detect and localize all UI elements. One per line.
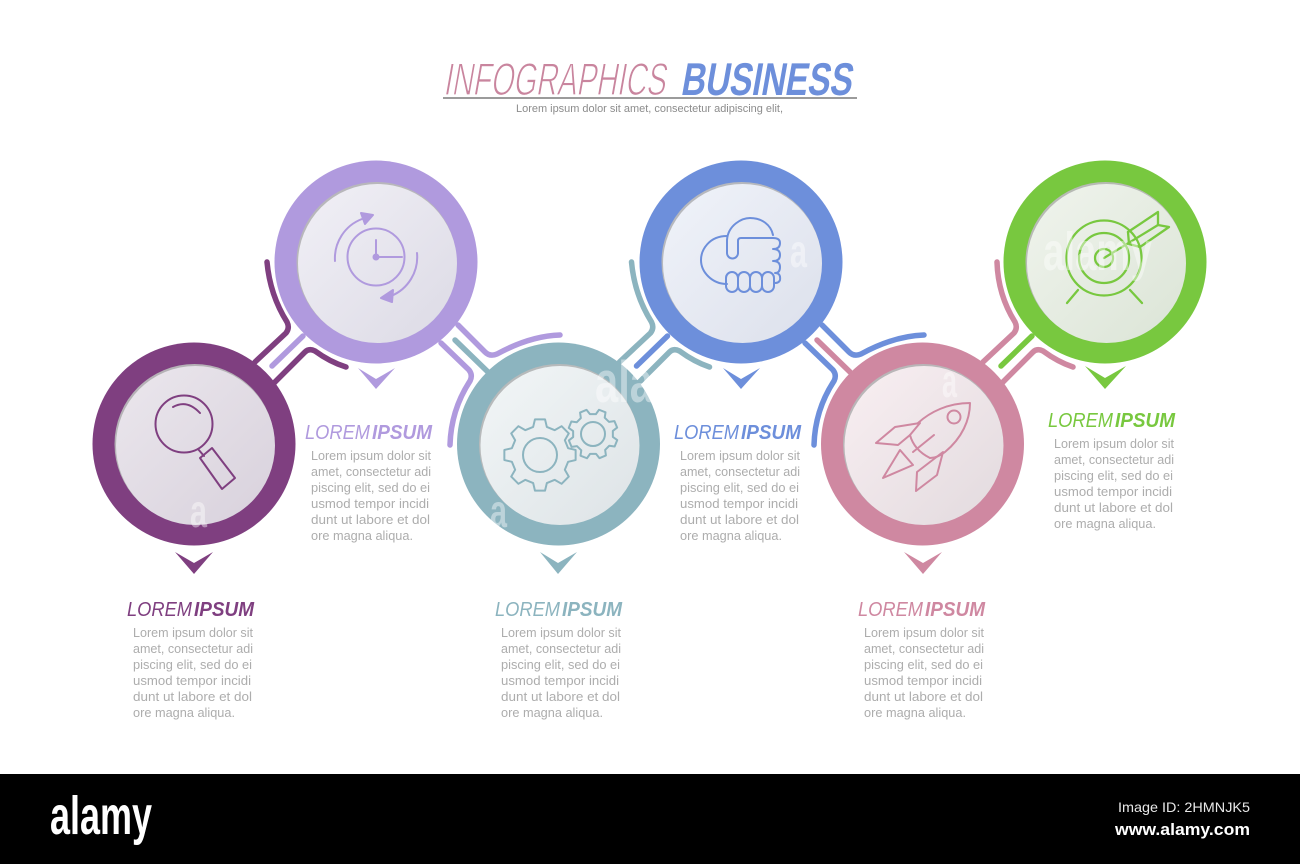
image id: Image ID: 2HMNJK5 xyxy=(1118,799,1250,815)
marker: step 5 chevron xyxy=(904,552,942,574)
text block: step 4: piscing elit, sed do ei xyxy=(680,481,799,495)
connector: step 1 to step 2 xyxy=(255,262,346,383)
text block: step 5: dunt ut labore et dol xyxy=(864,690,983,704)
heading: step 4 xyxy=(674,422,802,444)
text block: step 3: amet, consectetur adi xyxy=(501,642,621,656)
marker: step 2 chevron xyxy=(358,368,395,389)
heading: step 6: IPSUM xyxy=(1115,410,1176,432)
heading: step 6: LOREM xyxy=(1048,410,1113,432)
marker: step 3 chevron xyxy=(540,552,577,574)
marker: step 6 chevron xyxy=(1085,366,1126,389)
watermark overlays: a xyxy=(790,225,807,277)
heading: step 2: LOREM xyxy=(305,422,370,444)
text block: step 1: piscing elit, sed do ei xyxy=(133,658,252,672)
watermark overlays xyxy=(190,222,1152,537)
text block: step 2: Lorem ipsum dolor sit xyxy=(311,449,432,463)
heading: step 4: IPSUM xyxy=(741,422,802,444)
heading: step 6 xyxy=(1048,410,1176,432)
watermark overlays: alamy xyxy=(1043,222,1152,282)
text block: step 3: Lorem ipsum dolor sit xyxy=(501,626,622,640)
heading: step 3 xyxy=(495,599,623,621)
text block: step 4: amet, consectetur adi xyxy=(680,465,800,479)
watermark overlays: a xyxy=(190,485,207,537)
text block: step 1: usmod tempor incidi xyxy=(133,674,251,688)
text block: step 2: usmod tempor incidi xyxy=(311,497,429,511)
text block: step 4 xyxy=(674,422,802,543)
heading: step 1: LOREM xyxy=(127,599,192,621)
title: BUSINESS xyxy=(678,53,858,105)
connector: step 3 to step 4 xyxy=(620,262,710,383)
icon: target with arrow xyxy=(1066,212,1169,303)
heading: step 1 xyxy=(127,599,255,621)
subtitle: Lorem ipsum dolor sit amet, consectetur adipiscing elit, xyxy=(516,103,783,115)
text block: step 2: dunt ut labore et dol xyxy=(311,513,430,527)
footer bar xyxy=(0,774,1300,864)
text block: step 1: dunt ut labore et dol xyxy=(133,690,252,704)
text block: step 2: ore magna aliqua. xyxy=(311,529,413,543)
text block: step 3: usmod tempor incidi xyxy=(501,674,619,688)
icon: two gears xyxy=(504,402,625,491)
heading: step 3: IPSUM xyxy=(562,599,623,621)
heading: step 5 xyxy=(858,599,986,621)
heading: step 3: LOREM xyxy=(495,599,560,621)
step 4: handshake circle xyxy=(640,160,842,364)
text block: step 1: amet, consectetur adi xyxy=(133,642,253,656)
text block: step 6: piscing elit, sed do ei xyxy=(1054,469,1173,483)
icon: handshake xyxy=(701,218,780,292)
step 3: gears circle xyxy=(457,342,660,546)
icon: clock with rotating arrows xyxy=(335,213,417,302)
text block: step 5 xyxy=(858,599,986,720)
text block: step 3 xyxy=(495,599,623,720)
heading: step 2: IPSUM xyxy=(372,422,433,444)
text block: step 4: Lorem ipsum dolor sit xyxy=(680,449,801,463)
heading: step 1: IPSUM xyxy=(194,599,255,621)
text block: step 2: piscing elit, sed do ei xyxy=(311,481,430,495)
watermark overlays: a xyxy=(942,355,957,407)
text block: step 5: usmod tempor incidi xyxy=(864,674,982,688)
heading: step 5: LOREM xyxy=(858,599,923,621)
marker: step 1 chevron xyxy=(175,552,213,574)
watermark overlays: ala xyxy=(595,350,654,415)
heading: step 2 xyxy=(305,422,433,444)
text block: step 6: ore magna aliqua. xyxy=(1054,517,1156,531)
text block: step 6: usmod tempor incidi xyxy=(1054,485,1172,499)
connector: step 2 to step 3 xyxy=(441,325,560,445)
icon: magnifying glass xyxy=(156,396,235,489)
heading: step 4: LOREM xyxy=(674,422,739,444)
connector: step 5 to step 6 xyxy=(983,262,1073,383)
website: www.alamy.com xyxy=(1114,820,1250,839)
text block: step 5: piscing elit, sed do ei xyxy=(864,658,983,672)
marker: step 4 chevron xyxy=(723,368,760,389)
text block: step 6: dunt ut labore et dol xyxy=(1054,501,1173,515)
text block: step 1: Lorem ipsum dolor sit xyxy=(133,626,254,640)
step 6: target circle xyxy=(1004,160,1206,364)
footer logo: alamy xyxy=(50,786,152,846)
text block: step 6: amet, consectetur adi xyxy=(1054,453,1174,467)
text block: step 4: dunt ut labore et dol xyxy=(680,513,799,527)
text block: step 2 xyxy=(305,422,433,543)
title: INFOGRAPHICS xyxy=(441,53,672,105)
step 2: clock circle xyxy=(274,160,478,364)
text block: step 1 xyxy=(127,599,255,720)
text block: step 3: piscing elit, sed do ei xyxy=(501,658,620,672)
connector: step 4 to step 5 xyxy=(805,325,924,445)
text block: step 2: amet, consectetur adi xyxy=(311,465,431,479)
heading: step 5: IPSUM xyxy=(925,599,986,621)
text block: step 6 xyxy=(1048,410,1176,531)
step 1: magnifier circle xyxy=(92,342,296,546)
step 5: rocket circle xyxy=(821,342,1024,546)
text block: step 4: ore magna aliqua. xyxy=(680,529,782,543)
text block: step 4: usmod tempor incidi xyxy=(680,497,798,511)
icon: rocket xyxy=(876,403,970,491)
text block: step 3: ore magna aliqua. xyxy=(501,706,603,720)
text block: step 1: ore magna aliqua. xyxy=(133,706,235,720)
text block: step 6: Lorem ipsum dolor sit xyxy=(1054,437,1175,451)
text block: step 5: Lorem ipsum dolor sit xyxy=(864,626,985,640)
watermark overlays: a xyxy=(490,485,507,537)
text block: step 5: ore magna aliqua. xyxy=(864,706,966,720)
text block: step 5: amet, consectetur adi xyxy=(864,642,984,656)
text block: step 3: dunt ut labore et dol xyxy=(501,690,620,704)
